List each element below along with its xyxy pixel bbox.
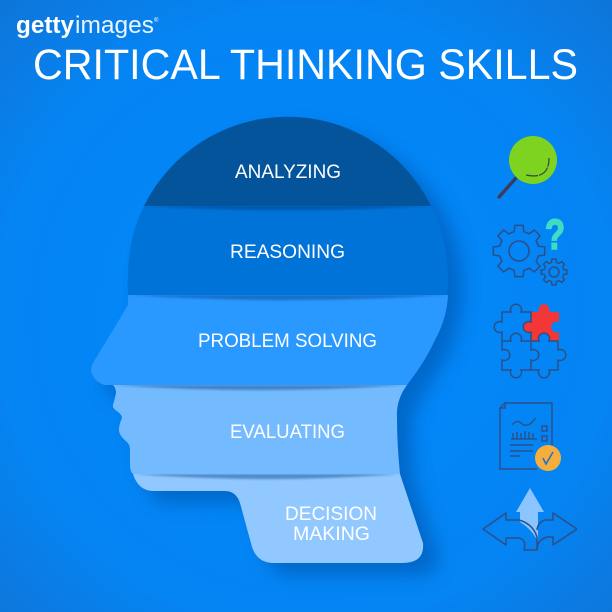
band: problem solving bbox=[91, 295, 448, 385]
head infographic bbox=[91, 117, 463, 575]
icon: gears and question mark: ? bbox=[545, 211, 565, 259]
label: reasoning: REASONING bbox=[230, 241, 345, 263]
label: decision making: MAKING bbox=[293, 523, 370, 545]
label: problem solving: PROBLEM SOLVING bbox=[198, 330, 377, 352]
label: decision making bbox=[285, 503, 377, 545]
watermark logo: getty bbox=[16, 12, 75, 39]
icon: report with check badge bbox=[500, 403, 561, 471]
watermark logo: images bbox=[75, 12, 154, 39]
icon: magnifying glass bbox=[499, 136, 557, 197]
head drop shadow bbox=[106, 129, 463, 575]
band: reasoning bbox=[128, 206, 448, 295]
title: CRITICAL THINKING SKILLS bbox=[33, 41, 578, 89]
band: evaluating bbox=[113, 385, 407, 474]
band: decision making bbox=[133, 474, 423, 563]
band: analyzing bbox=[144, 117, 431, 206]
watermark logo: ® bbox=[154, 17, 159, 24]
label: analyzing: ANALYZING bbox=[235, 161, 341, 183]
label: evaluating: EVALUATING bbox=[230, 421, 345, 443]
icon: gears and question mark bbox=[493, 211, 567, 285]
watermark logo bbox=[16, 12, 159, 39]
label: decision making: DECISION bbox=[285, 503, 377, 525]
icon: puzzle bbox=[494, 304, 566, 378]
icon: three-way arrows bbox=[483, 488, 577, 550]
